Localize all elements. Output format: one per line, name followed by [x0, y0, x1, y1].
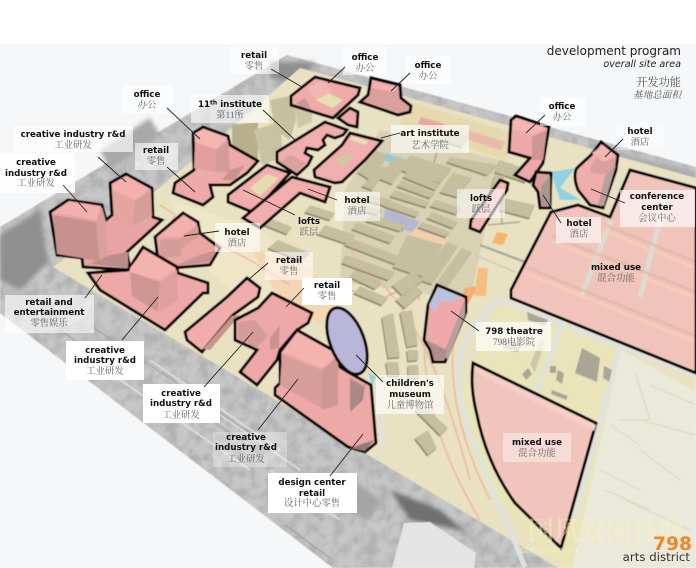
label: office right: 办公 — [553, 111, 572, 123]
watermark: 国风景园林网 — [528, 511, 684, 548]
building: lofts U-shape — [228, 165, 290, 212]
label: creative industry r&d lower two: creative — [161, 389, 201, 399]
background towers — [232, 95, 312, 165]
building: children's museum — [319, 302, 375, 380]
label: office top: office — [352, 53, 378, 63]
building: art institute — [314, 133, 382, 183]
label: creative industry r&d upper — [13, 126, 133, 182]
label: retail middle — [248, 252, 313, 280]
label: creative industry r&d lower one: industry r&d — [74, 356, 136, 366]
label: retail and entertainment: entertainment — [14, 308, 84, 318]
label: office right: office — [549, 102, 575, 112]
building: 11th institute — [277, 122, 347, 175]
building: retail small block — [338, 108, 358, 127]
label: 798 theatre: 798 theatre — [485, 327, 543, 337]
building: creative industry r&d middle — [235, 293, 312, 385]
label: design center retail: 设计中心零售 — [284, 497, 340, 509]
building: office and retail left — [173, 127, 258, 205]
label: conference center: center — [641, 203, 673, 213]
label: office top right: 办公 — [419, 70, 438, 82]
label: office top right: office — [415, 61, 441, 71]
mixed use block upper right — [511, 170, 696, 373]
label: mixed use upper: 混合功能 — [597, 272, 635, 284]
label: children's museum: museum — [389, 390, 431, 400]
label: retail middle: retail — [276, 256, 302, 266]
label: 11th institute: 第11所 — [216, 109, 245, 121]
label: retail left — [135, 143, 195, 192]
label: creative industry r&d lower three: 工业研发 — [227, 453, 265, 465]
label: office left: office — [134, 90, 160, 100]
mixed use block lower — [472, 363, 596, 548]
label: retail middle right: 零售 — [318, 290, 336, 302]
building: office right — [509, 116, 549, 182]
label: children's museum: 儿童博物馆 — [387, 399, 434, 411]
label: office top: 办公 — [356, 62, 375, 74]
building: hotel and conference center — [575, 142, 618, 208]
label: mixed use upper — [591, 263, 641, 284]
label: retail left: 零售 — [147, 155, 165, 167]
background warehouse blocks — [257, 130, 535, 455]
label: hotel far right: hotel — [627, 127, 653, 137]
roads and rail lines — [160, 140, 696, 567]
label: conference center — [591, 189, 695, 227]
label: retail middle: 零售 — [280, 265, 298, 277]
label: 798 theatre: 798电影院 — [493, 336, 536, 348]
label: creative industry r&d lower three: industry r&d — [215, 443, 277, 453]
label: creative industry r&d lower three — [213, 379, 298, 467]
label: mixed use upper: mixed use — [591, 263, 641, 273]
building: hotel left — [155, 213, 220, 268]
label: hotel small — [543, 195, 601, 243]
label: 11th institute: th — [210, 100, 217, 106]
label: art institute — [381, 125, 469, 153]
label: office left: 办公 — [138, 99, 157, 111]
label: creative industry r&d upper: creative industry r&d — [21, 130, 125, 140]
building: retail and entertainment — [88, 247, 208, 330]
label: hotel center: hotel — [344, 196, 370, 206]
label: mixed use lower — [503, 433, 571, 462]
label: mixed use lower: mixed use — [512, 438, 562, 448]
label: hotel small: 酒店 — [570, 228, 588, 240]
small buildings south of mixed use — [503, 312, 612, 400]
label: creative industry r&d lower one: 工业研发 — [86, 365, 124, 377]
label: office top right — [391, 56, 451, 91]
lower right faint blocks — [600, 372, 696, 530]
label: hotel left: hotel — [224, 228, 250, 238]
label: hotel left: 酒店 — [228, 237, 246, 249]
label: conference center: 会议中心 — [638, 212, 676, 224]
label: children's museum — [356, 355, 444, 414]
label: 11th institute: 11 — [198, 100, 210, 110]
label: creative industry r&d lower one: creative — [85, 346, 125, 356]
building: lofts right — [470, 180, 508, 232]
label: conference center: conference — [630, 192, 684, 202]
label: art institute: 艺术学院 — [411, 139, 449, 151]
title: development program: 基地总面积 — [633, 89, 682, 101]
label: creative industry r&d left: 工业研发 — [17, 177, 55, 189]
label: creative industry r&d left: creative — [16, 158, 56, 168]
label: creative industry r&d lower three: creative — [226, 433, 266, 443]
label: design center retail — [268, 434, 363, 513]
label: retail and entertainment — [5, 275, 102, 333]
label: retail and entertainment: 零售娱乐 — [30, 317, 68, 329]
building: hotel small — [533, 172, 551, 208]
label: creative industry r&d left: industry r&d — [5, 169, 67, 179]
label: lofts right — [457, 189, 505, 218]
label: hotel far right — [605, 122, 663, 157]
watermark: chla.com.cn — [520, 545, 578, 556]
label: 11th institute: institute — [217, 100, 262, 110]
logo: 798 arts district: arts district — [623, 550, 690, 564]
title: development program: overall site area — [603, 59, 681, 70]
label: creative industry r&d lower two — [143, 332, 253, 423]
building: hotel T-shape — [243, 177, 330, 228]
label: lofts — [243, 190, 320, 238]
label: creative industry r&d lower one — [66, 297, 158, 380]
building: 798 theatre — [424, 285, 466, 362]
title: development program — [547, 44, 682, 101]
label: retail and entertainment: retail and — [25, 298, 73, 308]
building: retail top — [291, 77, 360, 118]
label: retail — [230, 46, 302, 87]
label: 798 theatre — [451, 311, 551, 351]
label: lofts right: lofts — [470, 194, 492, 204]
building: office top — [360, 78, 411, 115]
label: retail: 零售 — [245, 60, 263, 72]
label: retail middle right — [286, 278, 352, 307]
label: lofts: lofts — [298, 217, 320, 227]
label: creative industry r&d lower two: industry r&d — [150, 399, 212, 409]
title: development program: development program — [547, 44, 681, 58]
label: design center retail: retail — [299, 489, 325, 499]
label: art institute: art institute — [400, 129, 460, 139]
label: creative industry r&d left — [0, 153, 87, 212]
label: hotel small: hotel — [566, 219, 592, 229]
label: hotel center: 酒店 — [348, 205, 366, 217]
logo: 798 arts district: 798 — [653, 534, 692, 555]
building: design center retail and creative industry r&d — [275, 330, 376, 452]
building: creative industry r&d left — [50, 174, 162, 270]
building: retail middle — [185, 278, 260, 352]
label: hotel center — [308, 189, 380, 221]
label: creative industry r&d upper: 工业研发 — [54, 139, 92, 151]
label: 11th institute — [191, 95, 295, 140]
label: mixed use lower: 混合功能 — [518, 447, 556, 459]
label: office left — [122, 85, 200, 139]
label: office right — [526, 97, 585, 133]
title: development program: 开发功能 — [636, 75, 681, 89]
logo: 798 arts district — [623, 534, 692, 564]
label: hotel far right: 酒店 — [631, 136, 649, 148]
label: retail: retail — [241, 51, 267, 61]
label: office top — [328, 47, 387, 83]
label: children's museum: children's — [386, 379, 434, 389]
label: retail middle right: retail — [314, 281, 340, 291]
label: hotel left — [184, 223, 260, 252]
label: creative industry r&d lower two: 工业研发 — [162, 409, 200, 421]
label: design center retail: design center — [278, 478, 346, 488]
label: lofts: 跃层 — [300, 227, 319, 238]
label: lofts right: 跃层 — [472, 204, 491, 215]
label: retail left: retail — [143, 146, 169, 156]
top white strip — [0, 0, 696, 44]
